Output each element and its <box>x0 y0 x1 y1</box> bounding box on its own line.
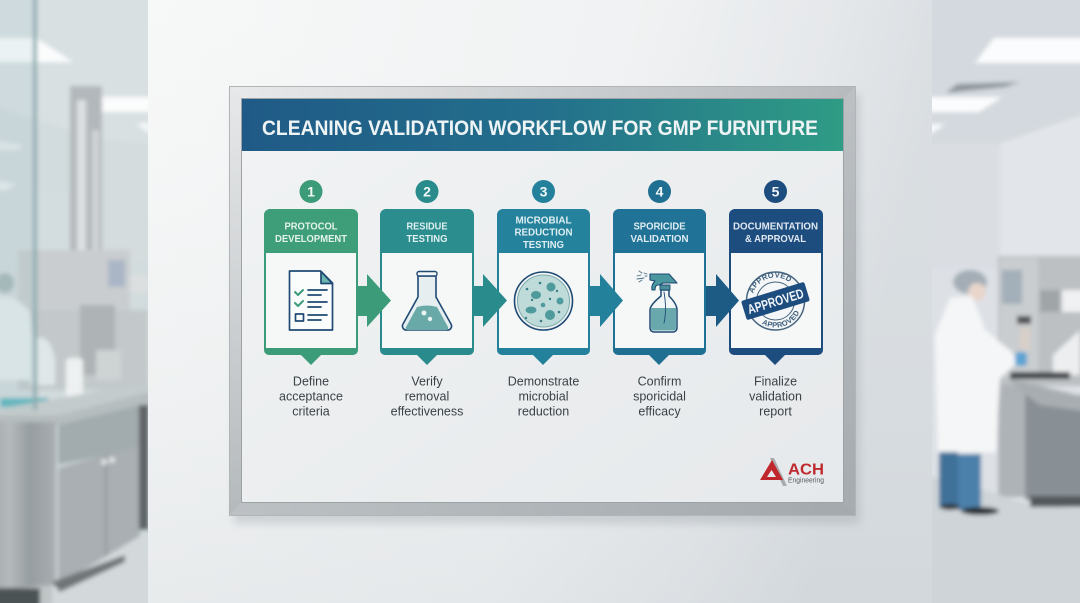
card 2: RESIDUE <box>406 220 448 232</box>
arrow 4 to 5 <box>706 274 739 327</box>
logo: ACH Engineering: ACH <box>788 462 824 478</box>
card 2: TESTING <box>406 233 448 245</box>
description 2: effectiveness <box>391 404 463 418</box>
icon: flask <box>402 272 452 330</box>
card 3: REDUCTION <box>514 226 572 238</box>
logo: ACH Engineering: Engineering <box>788 476 824 484</box>
step 4: sporicide validation <box>613 180 706 418</box>
icon: petri dish <box>514 272 572 330</box>
number badge 2 <box>416 180 438 203</box>
number badge 5 <box>764 180 787 203</box>
icon: checklist document <box>290 271 332 330</box>
step 3: microbial reduction testing <box>497 180 590 418</box>
description 1: acceptance <box>279 390 343 404</box>
arrow 3 to 4 <box>590 274 623 327</box>
icon: approved stamp: APPROVED <box>746 286 806 317</box>
card 5: & APPROVAL <box>745 233 807 245</box>
card 4: SPORICIDE <box>634 220 686 232</box>
card 3: MICROBIAL <box>516 214 572 226</box>
poster frame <box>229 86 860 524</box>
icon: spray bottle <box>637 271 677 332</box>
description 4: Confirm <box>638 374 681 388</box>
card 2 <box>380 209 474 365</box>
card 3: TESTING <box>523 239 564 251</box>
card 4 <box>613 209 706 365</box>
number badge 4 <box>648 180 671 203</box>
icon: approved stamp: APPROVED <box>762 310 798 328</box>
description 2: Verify <box>411 374 443 388</box>
title: CLEANING VALIDATION WORKFLOW FOR GMP FURNITURE <box>262 117 818 140</box>
number badge 3 <box>532 180 555 203</box>
background: cleanroom right with technician <box>925 0 1080 603</box>
number badge 2: 2 <box>423 184 431 200</box>
poster board <box>242 99 843 502</box>
number badge 3: 3 <box>540 184 548 200</box>
step 2: residue testing <box>380 180 474 418</box>
arrow 1 to 2 <box>357 274 391 327</box>
number badge 5: 5 <box>772 184 780 200</box>
background: cleanroom left <box>0 0 160 603</box>
description 5: report <box>759 404 792 418</box>
title banner <box>242 99 843 151</box>
card 5 <box>729 209 823 365</box>
description 3: Demonstrate <box>508 374 579 388</box>
arrow 2 to 3 <box>473 274 507 327</box>
description 1: Define <box>293 374 329 388</box>
description 5: validation <box>749 390 802 404</box>
description 3: microbial <box>518 390 569 404</box>
description 4: sporicidal <box>633 390 686 404</box>
card 4: VALIDATION <box>630 233 688 245</box>
description 2: removal <box>405 390 449 404</box>
logo: ACH Engineering <box>760 458 824 486</box>
icon: approved stamp <box>742 271 810 331</box>
number badge 4: 4 <box>656 184 664 200</box>
number badge 1 <box>300 180 322 203</box>
step 1: protocol development <box>264 180 358 418</box>
card 1: PROTOCOL <box>284 220 338 232</box>
icon: approved stamp: APPROVED <box>750 272 792 294</box>
card 5: DOCUMENTATION <box>733 220 818 232</box>
description 1: criteria <box>292 404 330 418</box>
number badge 1: 1 <box>307 184 315 200</box>
description 5: Finalize <box>754 374 797 388</box>
description 4: efficacy <box>638 404 681 418</box>
card 1: DEVELOPMENT <box>275 233 348 245</box>
card 1 <box>264 209 358 365</box>
description 3: reduction <box>518 404 569 418</box>
step 5: documentation and approval <box>729 180 823 418</box>
wall <box>148 0 932 603</box>
card 3 <box>497 209 590 365</box>
